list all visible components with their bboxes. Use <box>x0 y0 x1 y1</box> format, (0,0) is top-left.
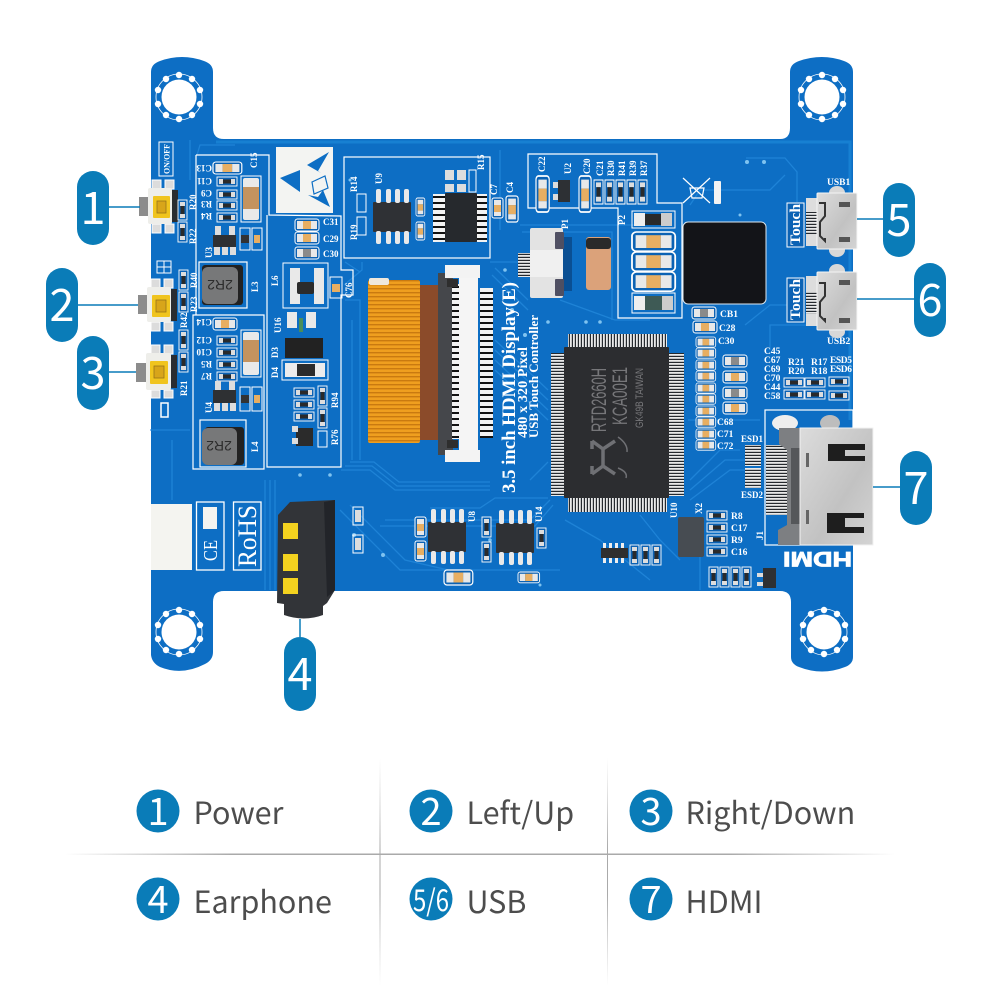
CE mark box: CE <box>200 540 222 561</box>
silkscreen labels left: U8 <box>467 511 477 522</box>
HDMI silkscreen logo: HDMI <box>783 547 852 570</box>
silkscreen labels left: C11 <box>196 176 212 186</box>
silkscreen labels right: C69 <box>764 365 781 375</box>
switch resistors <box>178 200 188 372</box>
legend: earphone: Earphone <box>194 878 332 922</box>
silkscreen labels left <box>179 152 765 540</box>
legend: earphone: 4 <box>147 869 169 924</box>
CE mark box <box>196 502 224 570</box>
silkscreen outlines <box>193 154 853 545</box>
EEPROM U9 <box>373 189 411 244</box>
silkscreen labels right: C44 <box>764 383 781 393</box>
silkscreen labels right: R8 <box>731 512 743 522</box>
HDMI port 7 <box>766 415 873 545</box>
flash IC <box>357 170 487 242</box>
silkscreen labels right: USB2 <box>827 337 850 347</box>
silkscreen labels left: C29 <box>323 234 339 244</box>
badge 6 <box>914 263 946 337</box>
silkscreen labels left: C31 <box>323 217 339 227</box>
silkscreen labels left: L4 <box>250 441 260 452</box>
silkscreen labels left: X2 <box>694 503 704 514</box>
silkscreen labels left: R21 <box>179 380 189 396</box>
silkscreen labels left: R41 <box>617 160 627 176</box>
silkscreen labels left: C7 <box>489 184 499 195</box>
leader line 2 <box>78 304 138 306</box>
side markings <box>157 142 173 417</box>
silkscreen labels left: D4 <box>270 367 280 378</box>
badge 6: 6 <box>918 264 942 329</box>
silkscreen labels left: R5 <box>201 359 212 369</box>
capacitors C7 and C4 <box>492 196 518 222</box>
silkscreen labels right: R20 <box>788 367 805 377</box>
silkscreen labels left: U10 <box>669 502 679 518</box>
RoHS mark box: RoHS <box>233 505 262 567</box>
silkscreen labels left: R20 <box>188 194 198 210</box>
silkscreen labels left: P1 <box>560 219 570 229</box>
silkscreen labels right: C72 <box>717 442 734 452</box>
tact switch 1 <box>139 180 178 233</box>
legend: left/up: Left/Up <box>466 789 574 833</box>
amp IC U14 <box>496 510 534 565</box>
silkscreen labels right <box>717 178 852 558</box>
circuit board <box>136 57 873 672</box>
leader line 3 <box>109 371 136 373</box>
badge 1: 1 <box>81 172 105 237</box>
leader line 5 <box>857 218 883 220</box>
capacitor column P2 <box>632 211 675 313</box>
silkscreen labels left: U2 <box>563 163 573 174</box>
legend: left/up: 2 <box>420 781 442 836</box>
silkscreen labels right: C16 <box>731 548 748 558</box>
badge 5 <box>883 183 915 257</box>
silkscreen labels left: U16 <box>273 317 283 333</box>
caps around amps <box>415 517 546 585</box>
silkscreen labels right: C58 <box>764 392 781 402</box>
legend: HDMI <box>630 869 762 924</box>
resistor and ESD cluster <box>784 377 849 400</box>
badge 2: 2 <box>50 269 74 334</box>
silkscreen labels right: ESD5 <box>830 356 852 366</box>
white label patch <box>151 504 192 570</box>
silkscreen labels right: CB1 <box>720 310 738 320</box>
badge 4 <box>284 637 316 711</box>
silkscreen labels left: R22 <box>188 228 198 244</box>
silkscreen labels left: R40 <box>189 272 199 288</box>
board title text <box>499 282 541 493</box>
silkscreen labels left: C30 <box>323 249 339 259</box>
legend: power: Power <box>194 789 284 833</box>
micro USB port 5: Touch <box>788 203 804 245</box>
legend: HDMI: HDMI <box>686 878 762 922</box>
legend: HDMI: 7 <box>640 869 662 924</box>
silkscreen labels left: J1 <box>755 530 765 540</box>
silkscreen labels left: U3 <box>204 247 214 258</box>
micro USB port 5 <box>787 186 857 257</box>
inductor L3 <box>202 265 243 305</box>
leader line 1 <box>109 206 140 208</box>
legend: USB <box>410 876 526 922</box>
badge 3: 3 <box>81 337 105 402</box>
silkscreen labels left: R4 <box>201 211 212 221</box>
silkscreen labels right: R21 <box>788 358 805 368</box>
decoupling caps column <box>692 307 747 450</box>
crystal X2 <box>678 517 704 557</box>
legend: right/down <box>630 781 855 836</box>
silkscreen labels left: R76 <box>330 429 340 445</box>
tact switch 2 <box>138 279 177 331</box>
silkscreen labels left: R14 <box>349 176 359 192</box>
Realtek crab logo <box>592 437 627 478</box>
silkscreen labels right: ESD6 <box>830 365 852 375</box>
silkscreen labels left: C21 <box>595 160 605 176</box>
legend: USB: USB <box>466 878 526 922</box>
silkscreen labels right: R18 <box>811 367 828 377</box>
leader line 6 <box>857 298 914 300</box>
amp IC U8 <box>428 509 466 564</box>
silkscreen labels left: R39 <box>628 160 638 176</box>
ESD warning logo <box>276 147 333 213</box>
silkscreen labels right: C17 <box>731 524 748 534</box>
badge 3 <box>77 336 109 410</box>
silkscreen labels left: R3 <box>201 199 212 209</box>
power section A components <box>213 162 262 255</box>
inductor L3: 2R2 <box>207 277 233 293</box>
silkscreen labels right: USB1 <box>827 178 850 188</box>
badge 7: 7 <box>904 452 928 517</box>
silkscreen labels left: U4 <box>204 402 214 413</box>
ESD arrays: ESD2 <box>741 490 764 500</box>
silkscreen labels right: C68 <box>717 418 734 428</box>
badge 5: 5 <box>887 184 911 249</box>
silkscreen labels left: R15 <box>476 154 486 170</box>
silkscreen labels left: R7 <box>201 371 212 381</box>
silkscreen labels left: C9 <box>201 188 212 198</box>
legend grid lines <box>65 758 895 986</box>
resistor network <box>601 543 661 565</box>
silkscreen labels left: R37 <box>639 160 649 176</box>
silkscreen labels left: R19 <box>349 224 359 240</box>
P1 connector <box>518 228 572 298</box>
silkscreen labels left: L3 <box>250 281 260 292</box>
board outline <box>151 57 853 672</box>
silkscreen labels right: C45 <box>764 347 781 357</box>
legend: right/down: Right/Down <box>686 789 855 833</box>
silkscreen labels left: C14 <box>196 317 212 327</box>
silkscreen labels left: U14 <box>534 506 544 522</box>
silkscreen labels left: R42 <box>179 312 189 328</box>
main chip RTD2660H <box>551 334 684 512</box>
board title text: USB Touch Controller <box>526 315 541 438</box>
silkscreen labels left: C76 <box>344 282 354 298</box>
silkscreen labels left: C20 <box>582 158 592 174</box>
silkscreen labels left: C15 <box>249 152 259 168</box>
FFC ribbon and connector <box>368 265 493 462</box>
silkscreen labels left: U9 <box>374 173 384 184</box>
vias <box>298 160 766 586</box>
silkscreen labels left: P2 <box>617 215 627 225</box>
legend: USB: 5/6 <box>413 876 449 920</box>
tantalum capacitor <box>586 237 611 290</box>
crossed-out bin icon <box>683 178 710 203</box>
silkscreen labels left: C4 <box>505 182 515 193</box>
mounting holes <box>155 72 848 657</box>
silkscreen labels left: C10 <box>196 347 212 357</box>
ESD arrays <box>741 434 764 500</box>
silkscreen labels right: C30 <box>718 337 735 347</box>
silkscreen labels left: C12 <box>196 335 212 345</box>
silkscreen labels left: L6 <box>270 275 280 286</box>
main chip RTD2660H: GK49B TAIWAN <box>634 368 646 428</box>
power section B components <box>282 219 342 447</box>
silkscreen labels right: C67 <box>764 356 781 366</box>
leader line 4 <box>299 619 301 637</box>
inductor L4: 2R2 <box>206 438 232 454</box>
edge highlight <box>216 142 850 420</box>
silkscreen labels right: R17 <box>811 358 828 368</box>
board title text: 3.5 inch HDMI Display(E) <box>499 282 520 493</box>
badge 7 <box>900 451 932 525</box>
main chip RTD2660H: KCA00E1 <box>609 367 632 425</box>
silkscreen labels right: C70 <box>764 374 781 384</box>
silkscreen labels left: R94 <box>330 392 340 408</box>
legend: right/down: 3 <box>640 781 662 836</box>
power section A lower components <box>213 318 262 411</box>
inductor L4 <box>202 427 244 465</box>
copper traces <box>150 140 850 590</box>
resistor group near HDMI <box>707 511 776 588</box>
micro USB port 6 <box>787 264 857 338</box>
board title text: 480 x 320 Pixel <box>515 347 530 438</box>
audio jack (port 4) <box>277 500 363 618</box>
legend: earphone <box>136 869 332 924</box>
silkscreen labels right: C71 <box>717 430 734 440</box>
U2 regulator group <box>536 176 647 212</box>
white marker bar <box>714 181 721 204</box>
silkscreen labels left: C22 <box>537 156 547 172</box>
badge 4: 4 <box>288 638 312 703</box>
tact switch 3 <box>136 345 177 398</box>
main chip RTD2660H: RTD2660H <box>588 368 611 432</box>
micro USB port 6: Touch <box>788 278 804 320</box>
silkscreen labels left: D3 <box>270 347 280 358</box>
badge 1 <box>77 171 109 245</box>
black square pad <box>683 222 766 304</box>
silkscreen labels left: R23 <box>189 296 199 312</box>
silkscreen labels right: C28 <box>719 324 736 334</box>
legend: left/up <box>410 781 574 836</box>
side markings: ON/OFF <box>162 144 172 174</box>
ESD arrays: ESD1 <box>741 434 764 444</box>
silkscreen labels right: R9 <box>731 536 743 546</box>
leader line 7 <box>873 486 900 488</box>
silkscreen labels left: R30 <box>606 160 616 176</box>
silkscreen labels left: C13 <box>196 163 212 173</box>
legend: power: 1 <box>147 781 169 836</box>
legend: power <box>136 781 284 836</box>
badge 2 <box>46 268 78 342</box>
